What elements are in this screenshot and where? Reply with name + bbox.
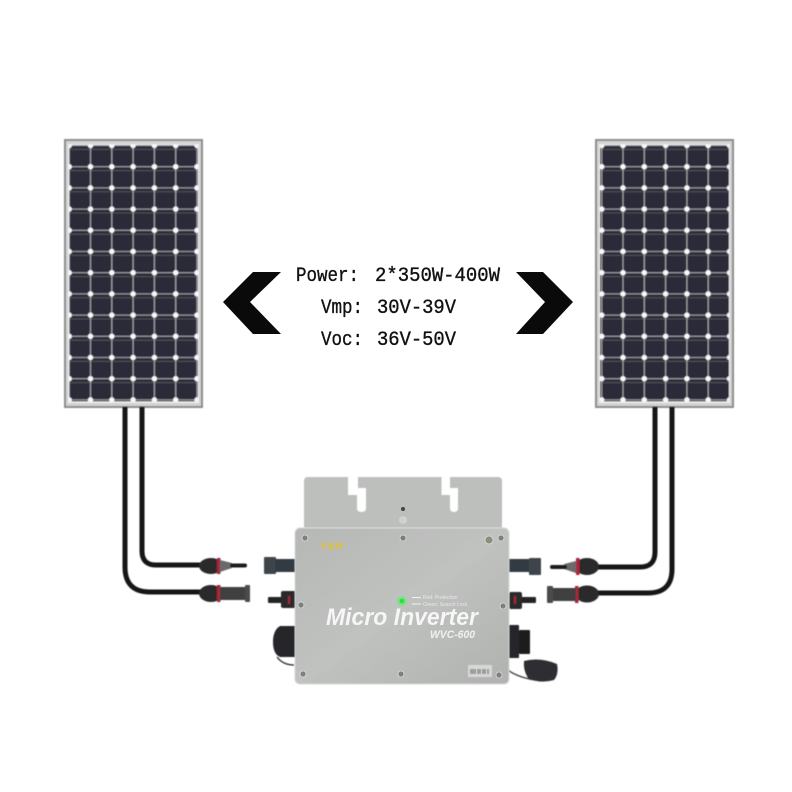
cables: right panel to connectors	[547, 407, 672, 603]
mounting plate with slots	[304, 477, 502, 528]
arrow: left chevron	[223, 272, 281, 334]
status LED	[397, 596, 407, 606]
brand label: Y&H	[320, 541, 343, 551]
LED legend: Green: Search Lock	[423, 602, 468, 608]
connector: left lower	[199, 585, 250, 602]
spec: Vmp: Vmp:	[321, 297, 363, 320]
spec: power: 2*350W-400W	[375, 265, 500, 288]
connector: right lower	[547, 586, 599, 603]
spec: Voc	[321, 329, 456, 352]
LED legend	[412, 595, 468, 608]
spec: power: Power:	[296, 265, 359, 288]
panel: left solar panel	[65, 140, 202, 407]
spec: power	[296, 265, 500, 288]
spec: Voc: 36V-50V	[377, 329, 456, 352]
cables: left panel to connectors	[125, 407, 250, 602]
model name: WVC-600	[430, 629, 476, 641]
barcode sticker	[468, 665, 492, 677]
inverter left ports	[264, 557, 297, 665]
screws	[298, 535, 506, 678]
panel: right solar panel	[596, 140, 733, 407]
text block: electrical specifications	[296, 265, 500, 352]
inverter body	[295, 528, 509, 684]
arrow: right chevron	[516, 272, 573, 334]
inverter: WVC-600 micro inverter	[264, 477, 558, 684]
connector: right upper	[550, 558, 599, 575]
spec: Vmp: 30V-39V	[377, 297, 456, 320]
inverter right ports	[508, 558, 558, 682]
LED legend: Red: Protection	[423, 595, 458, 601]
plate hole	[399, 507, 407, 524]
spec: Vmp	[321, 297, 456, 320]
spec: Voc: Voc:	[321, 329, 363, 352]
connector: left upper	[199, 558, 247, 574]
product name: Micro Inverter	[326, 604, 480, 631]
